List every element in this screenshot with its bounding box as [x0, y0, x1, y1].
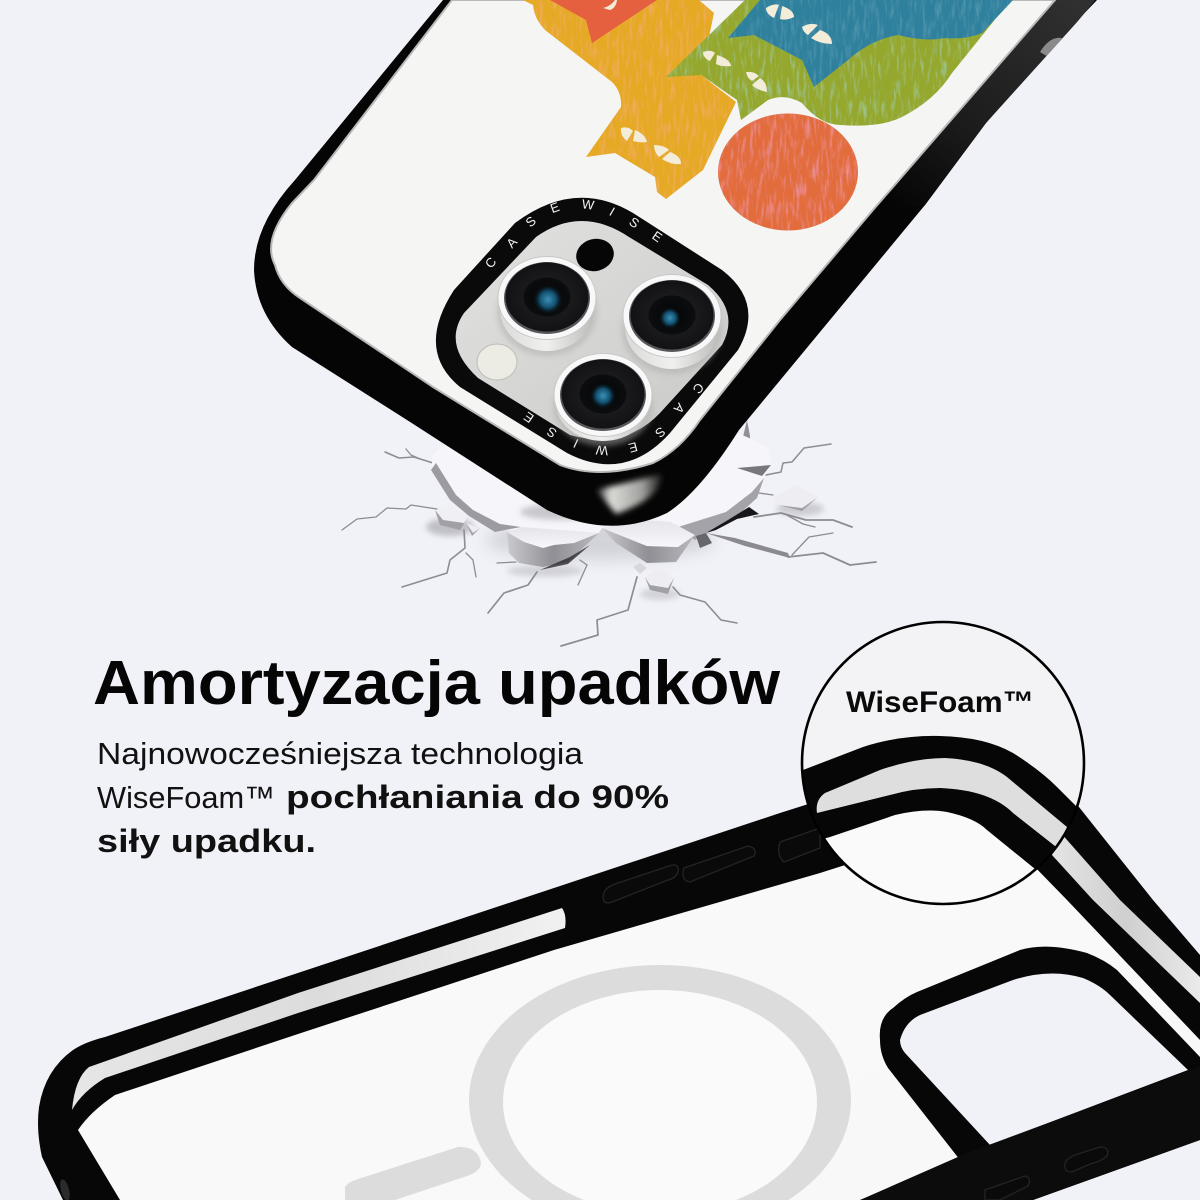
- magnified interior: [825, 810, 1034, 882]
- WiseFoam label: WiseFoam™: [846, 686, 1034, 719]
- green cat: [666, 0, 1013, 126]
- description text: WiseFoam™: [97, 780, 275, 815]
- phone in case: [254, 0, 1097, 526]
- lens bottom: [553, 354, 653, 446]
- description text: [97, 736, 669, 859]
- microphone hole: [573, 235, 617, 275]
- bumper side sheen: [596, 0, 1095, 514]
- cat artwork: [523, 0, 1013, 230]
- cat eyes: [603, 0, 832, 164]
- back panel: [271, 0, 1055, 472]
- foam slot left: [72, 908, 566, 1110]
- CASEWISE ring lettering: S: [522, 213, 539, 230]
- heading: Amortyzacja upadków: [93, 649, 781, 718]
- CASEWISE ring lettering: E: [649, 228, 665, 245]
- magnified foam layer: [817, 758, 1067, 850]
- rock slab left: [507, 527, 599, 570]
- magsafe alignment pill: [345, 1147, 481, 1200]
- CASEWISE ring lettering: S: [652, 424, 668, 441]
- CASEWISE ring lettering: I: [571, 436, 581, 451]
- CASEWISE ring lettering: E: [521, 409, 537, 426]
- magsafe ring: [469, 965, 851, 1200]
- small rock fragments: [435, 485, 818, 594]
- CASEWISE ring lettering: C: [482, 254, 499, 271]
- description text: Najnowocześniejsza technologia: [97, 736, 584, 771]
- CASEWISE ring lettering: A: [671, 400, 688, 417]
- camera bump: [436, 196, 748, 464]
- side buttons: [603, 828, 1108, 1200]
- CASEWISE ring lettering: C: [690, 380, 707, 397]
- case black bumper: [254, 0, 1097, 526]
- rock slab right: [602, 520, 695, 563]
- description text: pochłaniania do 90%: [286, 779, 669, 815]
- CASEWISE ring lettering: S: [544, 424, 559, 441]
- CASEWISE ring lettering: [482, 196, 707, 459]
- red cat: [528, 0, 657, 43]
- flash: [477, 344, 517, 380]
- foam slot right: [1052, 832, 1200, 1003]
- CASEWISE ring lettering: I: [607, 204, 618, 219]
- CASEWISE ring lettering: A: [503, 234, 520, 251]
- lens top left: [497, 256, 597, 356]
- CASEWISE ring lettering: S: [626, 214, 642, 231]
- open phone case from inside: [38, 759, 1200, 1200]
- CASEWISE ring lettering: E: [627, 439, 639, 456]
- camera cut-out: [880, 947, 1200, 1160]
- CASEWISE ring lettering: E: [548, 199, 562, 216]
- orange circle: [718, 114, 858, 230]
- lens top right: [622, 274, 722, 374]
- case interior: [78, 822, 1200, 1200]
- description text: siły upadku.: [97, 823, 316, 859]
- yellow cat: [523, 0, 736, 199]
- charging hole left: [58, 1178, 72, 1200]
- cracked ground impact: [342, 380, 876, 646]
- lower side band: [860, 1067, 1200, 1200]
- CASEWISE ring lettering: W: [594, 442, 609, 459]
- CASEWISE ring lettering: W: [581, 196, 596, 213]
- magnified outer bumper: [804, 736, 1076, 868]
- blue cat: [728, 0, 1013, 87]
- case black frame: [38, 759, 1200, 1200]
- magnified circle: WiseFoam: [790, 622, 1090, 910]
